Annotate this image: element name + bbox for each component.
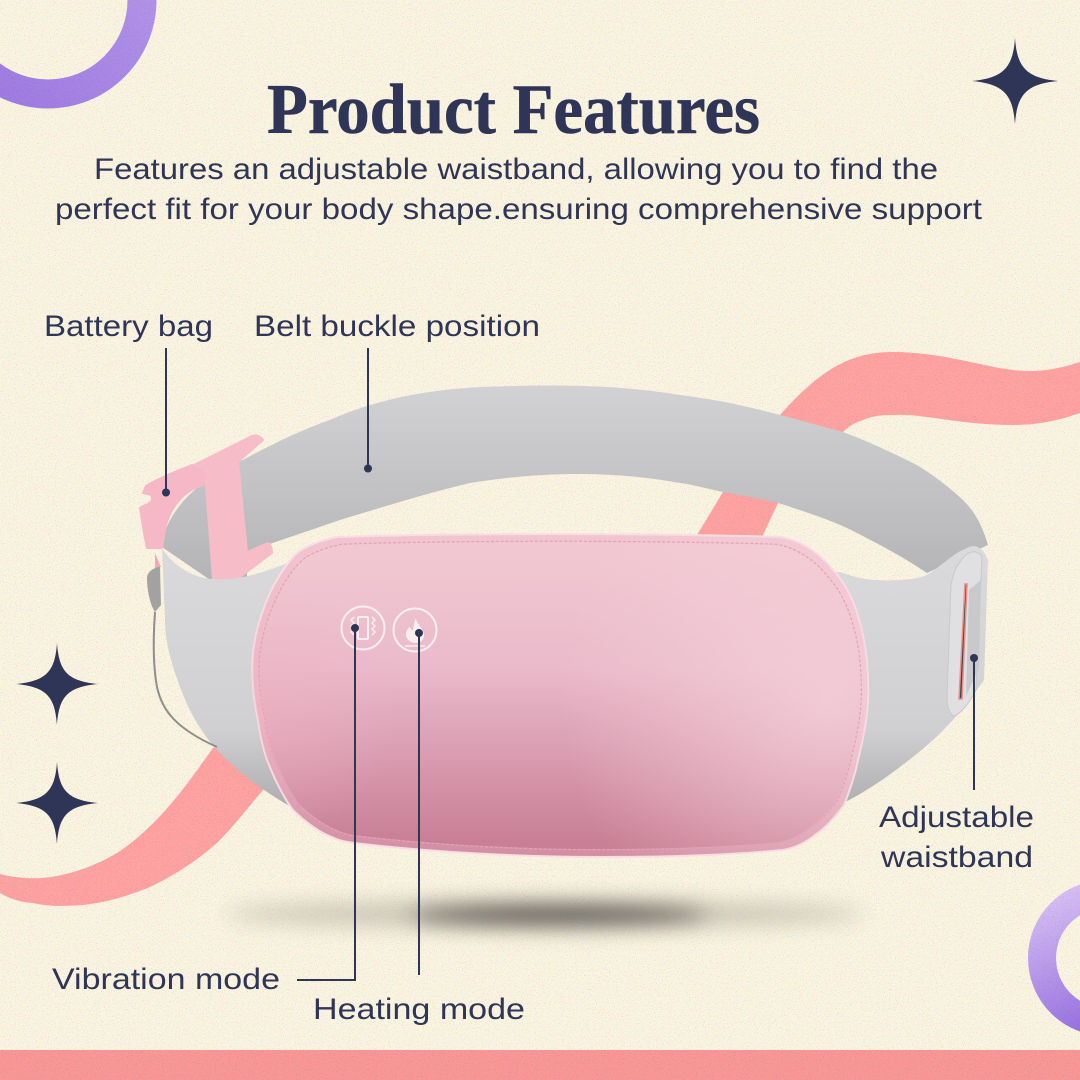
adjustable buckle [947,552,982,716]
shadow under belt [225,901,865,927]
product: waist belt [140,386,988,857]
decorative purple arc bottom-right [1042,894,1080,1022]
belt back strap [162,386,988,582]
icon: heating mode [394,608,436,652]
star left lower [16,762,98,844]
label: adjustable waistband: Adjustable [879,801,1034,834]
subtitle [55,153,983,226]
label: battery bag [44,310,213,496]
label: heating mode: Heating mode [313,993,525,1026]
label: battery bag: Battery bag [44,310,213,343]
label: vibration mode: Vibration mode [52,963,280,996]
front strap [162,546,988,808]
title: Product Features [267,71,760,149]
star top-right [972,38,1058,124]
label: belt buckle position [254,310,540,472]
label: adjustable waistband [879,654,1034,874]
subtitle: perfect fit for your body shape.ensuring comprehensive support [55,193,983,226]
label: belt buckle position: Belt buckle position [254,310,540,343]
decorative pink wave [0,352,1080,906]
label: vibration mode [52,624,359,996]
pad stitching [259,541,861,850]
icon: vibration mode [342,606,384,650]
label: heating mode [313,629,525,1026]
bottom bar [0,1050,1080,1080]
label: adjustable waistband: waistband [880,841,1033,874]
battery bag [140,465,205,548]
subtitle: Features an adjustable waistband, allowing you to find the [94,153,938,186]
decorative purple arc top-left [0,0,142,94]
heating pad [252,534,868,857]
buckle slot [959,584,967,699]
connector and wire [147,553,217,747]
pink strap [190,436,272,579]
star left upper [16,643,98,725]
